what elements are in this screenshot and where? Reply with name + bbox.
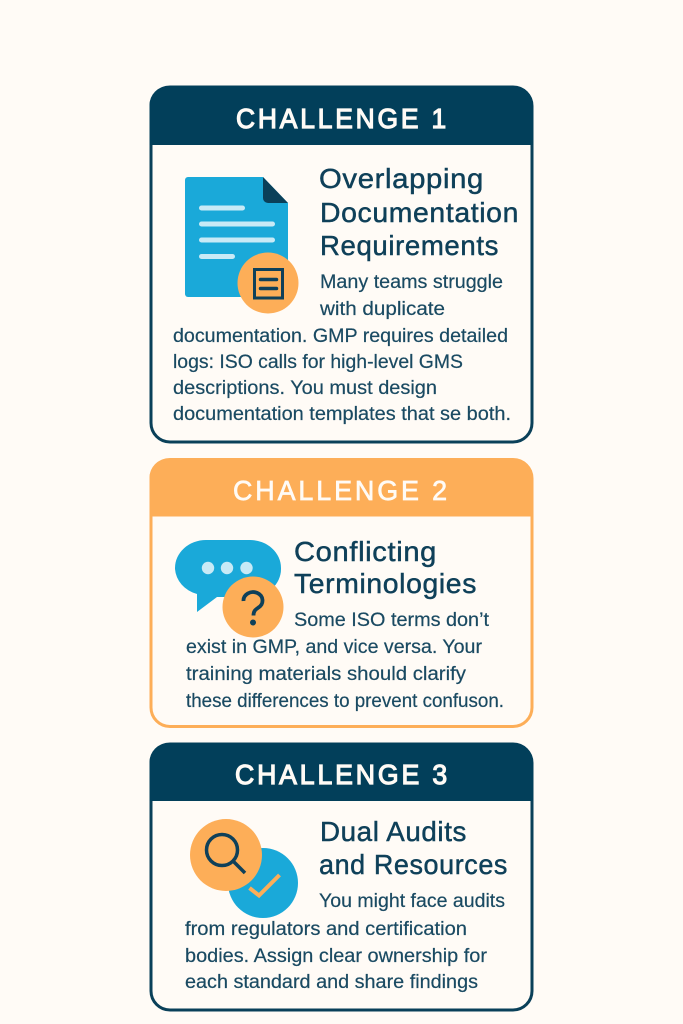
panel: challenge 2 — [150, 458, 533, 726]
text: challenge 1 body — [173, 272, 511, 425]
text: challenge 2 body: exist in GMP, and vice versa. Your — [186, 637, 483, 658]
text: challenge 1 body: logs: ISO calls for high-level GMS — [173, 352, 463, 373]
icon: magnifier and check circles — [190, 819, 298, 918]
heading: overlapping documentation requirements — [319, 163, 519, 261]
text: challenge 2 body: Some ISO terms don’t — [294, 610, 490, 631]
text: challenge 1 body: with duplicate — [319, 299, 445, 320]
header: challenge 3 — [150, 743, 533, 801]
text: challenge 1 body: documentation templates that se both. — [173, 404, 511, 425]
heading: overlapping documentation requirements: Documentation — [320, 197, 519, 228]
text: challenge 3 body: each standard and share findings — [185, 972, 478, 993]
text: challenge 1 body: documentation. GMP requires detailed — [173, 326, 508, 347]
heading: overlapping documentation requirements: Requirements — [320, 230, 499, 261]
text: challenge 3 body: You might face audits — [319, 891, 505, 912]
heading: overlapping documentation requirements: Overlapping — [319, 163, 484, 194]
text: challenge 3 body: bodies. Assign clear ownership for — [185, 946, 488, 967]
icon: document with badge — [185, 177, 298, 314]
text: challenge 3 body — [185, 891, 505, 993]
panel: challenge 3 — [150, 743, 533, 1010]
text: challenge 2 body — [186, 610, 504, 712]
header: challenge 2 — [150, 458, 533, 516]
text: challenge 2 body: training materials should clarify — [186, 664, 467, 685]
heading: conflicting terminologies — [294, 536, 477, 599]
header: challenge 1: CHALLENGE 1 — [236, 103, 449, 134]
heading: dual audits and resources: Dual Audits — [320, 816, 467, 847]
header: challenge 3: CHALLENGE 3 — [235, 759, 450, 790]
heading: conflicting terminologies: Terminologies — [294, 568, 477, 599]
text: challenge 1 body: Many teams struggle — [320, 272, 503, 293]
text: challenge 2 body: these differences to prevent confuson. — [186, 691, 504, 712]
text: challenge 3 body: from regulators and certification — [185, 919, 467, 940]
text: challenge 1 body: descriptions. You must design — [173, 378, 437, 399]
heading: dual audits and resources — [319, 816, 508, 880]
header: challenge 1 — [150, 86, 533, 145]
panel: challenge 1 — [150, 86, 533, 442]
heading: conflicting terminologies: Conflicting — [294, 536, 437, 567]
icon: speech bubble with question mark — [175, 540, 284, 638]
heading: dual audits and resources: and Resources — [319, 849, 508, 880]
header: challenge 2: CHALLENGE 2 — [233, 475, 450, 506]
